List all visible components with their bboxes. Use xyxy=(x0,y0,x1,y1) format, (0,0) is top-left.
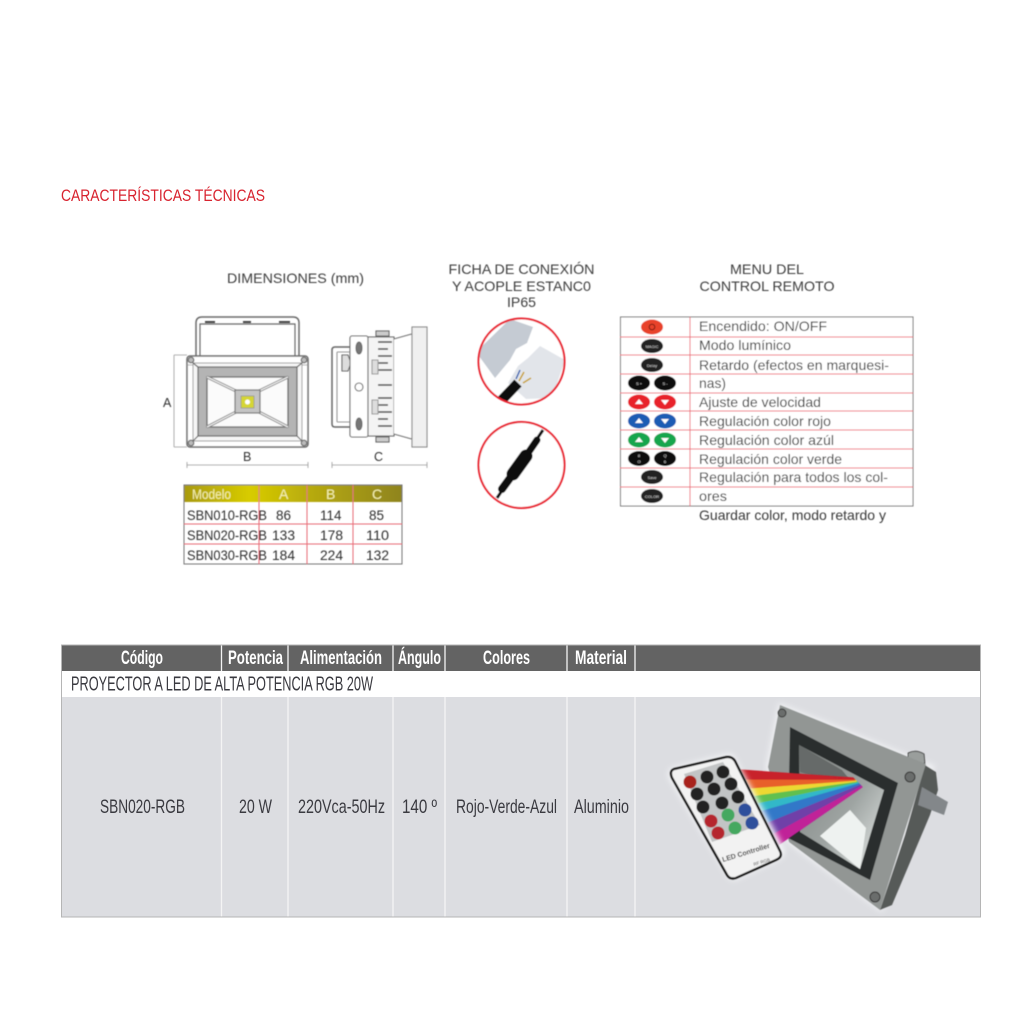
heading: remote control menu: MENU DEL xyxy=(730,261,804,277)
table: models and dimensions: 110 xyxy=(366,528,389,543)
table: models and dimensions: 86 xyxy=(276,508,291,523)
table header: Material xyxy=(575,648,627,669)
table: models and dimensions xyxy=(184,485,402,564)
remote function labels: Regulación color rojo xyxy=(699,413,831,429)
dimension labels: B xyxy=(243,450,251,464)
table: models and dimensions: B xyxy=(326,486,335,502)
projector xyxy=(766,703,948,912)
dimension labels: A xyxy=(163,396,172,410)
panel: remote control menu xyxy=(620,261,913,523)
panel: connector xyxy=(448,261,594,508)
heading: connector xyxy=(448,261,594,310)
table: remote control functions xyxy=(620,317,913,523)
remote button icons: 6 xyxy=(664,459,667,464)
table header: Ángulo xyxy=(398,647,441,669)
table: product specifications xyxy=(61,645,981,917)
panel: dimensions xyxy=(163,270,427,564)
table header xyxy=(61,645,981,671)
dimension lines xyxy=(174,355,427,468)
remote function labels: Modo lumínico xyxy=(699,337,791,353)
table: models and dimensions: 132 xyxy=(366,548,389,563)
heading: remote control menu: CONTROL REMOTO xyxy=(700,278,835,294)
remote button icons: COLOR xyxy=(645,494,659,499)
table: models and dimensions: SBN030-RGB xyxy=(187,548,267,563)
infographic page xyxy=(61,186,981,918)
table header: Colores xyxy=(483,648,530,669)
product photo: projector and remote xyxy=(668,703,948,912)
table: models and dimensions: 184 xyxy=(272,548,295,563)
remote function labels: Regulación color verde xyxy=(699,451,842,467)
remote function labels: Regulación para todos los col- xyxy=(699,469,888,485)
table: models and dimensions: Modelo xyxy=(192,486,231,502)
heading: connector: FICHA DE CONEXIÓN xyxy=(448,261,594,277)
table header: Alimentación xyxy=(300,648,382,669)
table: models and dimensions: 133 xyxy=(272,528,295,543)
remote button icons: Save xyxy=(647,475,657,480)
table row: product values: 140 º xyxy=(402,796,437,818)
heading: dimensions: DIMENSIONES (mm) xyxy=(227,270,364,286)
table: models and dimensions: 114 xyxy=(320,508,342,523)
table body background xyxy=(61,697,981,917)
table: models and dimensions: SBN010-RGB xyxy=(187,508,267,523)
table: models and dimensions: SBN020-RGB xyxy=(187,528,267,543)
table: models and dimensions: A xyxy=(279,486,289,502)
remote control: RF RGB xyxy=(753,857,771,867)
heading: connector: Y ACOPLE ESTANC0 xyxy=(452,278,591,294)
table: models and dimensions: 85 xyxy=(369,508,384,523)
table: models and dimensions: 178 xyxy=(320,528,343,543)
remote function labels xyxy=(699,318,889,523)
remote button icons: Delay xyxy=(647,363,657,368)
remote function labels: Encendido: ON/OFF xyxy=(699,318,827,334)
remote function labels: Guardar color, modo retardo y xyxy=(699,507,886,523)
table: models and dimensions: C xyxy=(372,486,382,502)
remote function labels: ores xyxy=(699,488,727,504)
dimension labels: C xyxy=(374,450,383,464)
title: CARACTERÍSTICAS TÉCNICAS xyxy=(61,186,265,205)
remote control: LED Controller xyxy=(722,843,771,864)
diagram: front view of projector xyxy=(187,317,308,447)
diagram: side view of projector xyxy=(332,327,427,447)
rainbow beam xyxy=(740,770,862,845)
table row: product values: Aluminio xyxy=(574,796,629,818)
remote function labels: Ajuste de velocidad xyxy=(699,394,821,410)
table header: Código xyxy=(121,648,163,669)
heading: connector: IP65 xyxy=(507,294,536,310)
remote control xyxy=(668,754,785,880)
icon: connection plug xyxy=(476,318,565,404)
remote function labels: nas) xyxy=(699,375,726,391)
remote button icons: 8 xyxy=(638,453,641,458)
table: models and dimensions: 224 xyxy=(320,548,343,563)
remote button icons xyxy=(628,320,676,503)
table header: Potencia xyxy=(228,648,283,669)
table row: product values: 220Vca-50Hz xyxy=(298,796,385,818)
remote button icons: MAGIC xyxy=(645,344,659,349)
table row: product values: 20 W xyxy=(239,796,272,818)
icon: waterproof coupling xyxy=(478,422,564,508)
remote function labels: Retardo (efectos en marquesi- xyxy=(699,357,889,373)
remote button icons: Q xyxy=(663,453,667,458)
remote function labels: Regulación color azúl xyxy=(699,432,834,448)
table row: product name xyxy=(61,671,981,697)
remote button icons: S - xyxy=(662,381,668,386)
heading: remote control menu xyxy=(700,261,835,294)
table row: product values xyxy=(100,796,629,818)
remote button icons: S + xyxy=(636,381,643,386)
table row: product values: SBN020-RGB xyxy=(100,796,185,818)
table row: product name: PROYECTOR A LED DE ALTA POTENCIA RGB 20W xyxy=(71,674,373,696)
table row: product values: Rojo-Verde-Azul xyxy=(456,796,557,818)
dimension labels xyxy=(163,396,383,464)
remote button icons: O xyxy=(637,459,641,464)
